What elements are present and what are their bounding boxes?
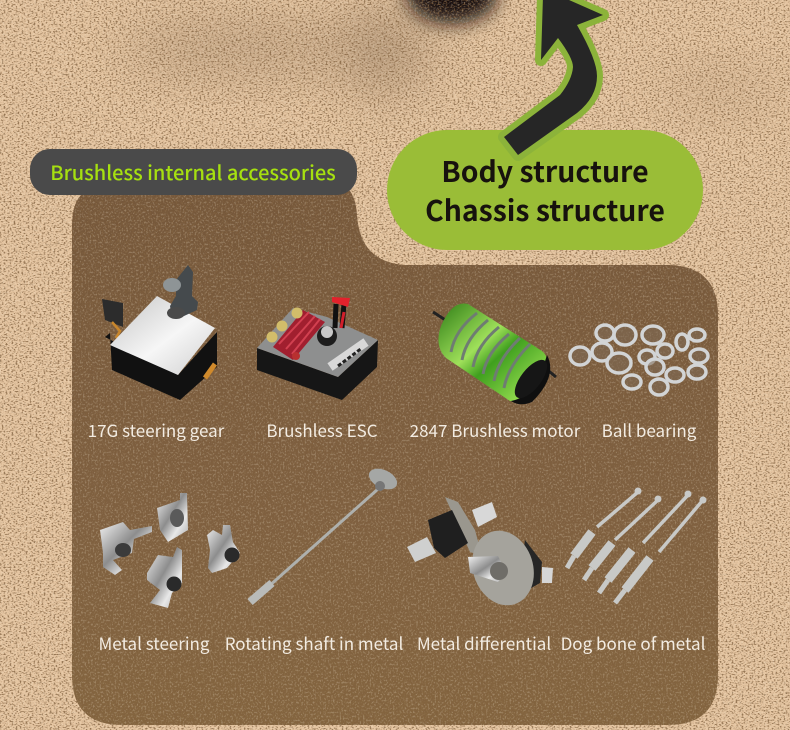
icon: rotating shaft [250, 465, 400, 602]
icon: dog bones [567, 488, 706, 603]
label: 2847 Brushless motor [410, 417, 581, 442]
label: 17G steering gear [88, 417, 225, 442]
label: Brushless ESC [266, 417, 378, 442]
green pill: structure [387, 130, 703, 250]
icon: brushless motor [433, 303, 556, 404]
icon: brushless ESC [257, 297, 378, 400]
label: Ball bearing [602, 417, 697, 442]
icon: ball bearings [570, 325, 708, 395]
label: Rotating shaft in metal [225, 630, 403, 655]
dark pill heading [30, 149, 357, 195]
label: Metal steering [98, 630, 210, 655]
dark pill heading: Brushless internal accessories [50, 157, 336, 186]
label: Dog bone of metal [561, 630, 706, 655]
pill text: Body structure [441, 150, 649, 191]
icon: steering gear [102, 265, 217, 400]
brown accessories panel [72, 185, 718, 725]
pill text line two: Chassis structure [425, 189, 665, 230]
label: Metal differential [417, 630, 551, 655]
icon: metal steering knuckles [100, 493, 240, 608]
arrow pointing up [504, 0, 603, 155]
icon: metal differential [407, 497, 553, 613]
